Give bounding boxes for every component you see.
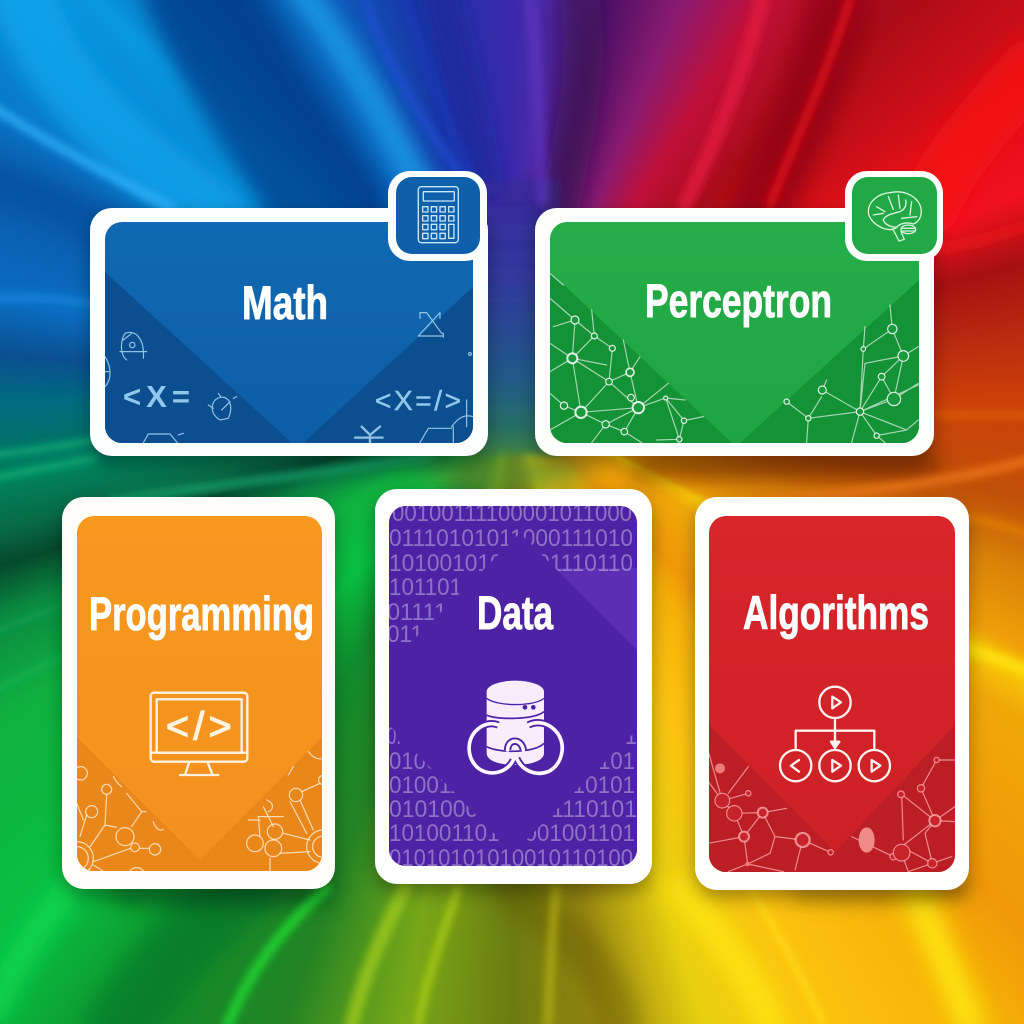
central olive haze	[420, 454, 590, 490]
binary pattern: 00100111100001011000	[392, 500, 632, 527]
binary pattern: 1	[625, 723, 637, 750]
panel: Data	[375, 489, 652, 892]
heading: Data: Data	[477, 586, 554, 639]
icon: brain badge	[845, 171, 943, 261]
icon: flow tree	[780, 687, 890, 781]
card frame	[695, 497, 969, 890]
binary pattern	[387, 500, 637, 872]
binary pattern: 0.	[387, 723, 401, 750]
card frame	[375, 489, 652, 884]
central gap glow	[460, 180, 560, 456]
binary pattern: 011	[387, 621, 423, 648]
card face	[77, 516, 322, 871]
icon: database with links	[469, 681, 562, 773]
heading: Programming: Programming	[89, 587, 314, 640]
card frame	[62, 497, 335, 889]
binary pattern: 01111	[387, 599, 447, 626]
icon: monitor with code: </>	[166, 704, 232, 748]
panel: Programming	[60, 497, 340, 897]
binary pattern: 101101	[389, 574, 462, 601]
binary pattern: 10100101011101110110	[389, 550, 633, 577]
card face	[389, 506, 637, 866]
card frame	[535, 208, 934, 456]
binary pattern: 01001101011010010101	[389, 772, 635, 799]
card frame	[90, 208, 488, 456]
card face	[105, 222, 473, 443]
binary pattern: 01110101011000111010	[389, 525, 633, 552]
circuit pattern	[77, 738, 322, 871]
panel: Algorithms	[695, 497, 969, 898]
math symbols right: <X=/>	[375, 385, 461, 416]
icon: monitor with code	[151, 693, 247, 775]
binary pattern: 10100110101001001101	[389, 820, 635, 847]
heading: Perceptron: Perceptron	[645, 274, 832, 327]
neural network pattern	[550, 272, 919, 443]
panel: Perceptron	[535, 171, 943, 464]
math symbols left: <X=	[123, 379, 190, 414]
icon: calculator badge	[388, 171, 487, 261]
binary pattern: 01010001011101110101	[389, 796, 637, 823]
binary pattern: 01010101010010110100	[389, 845, 633, 872]
card face	[709, 516, 955, 872]
heading: Math: Math	[242, 276, 328, 329]
network pattern	[708, 725, 955, 872]
binary pattern: 01001010010101010101	[389, 748, 635, 775]
corner pattern and doodles	[105, 272, 473, 443]
heading: Algorithms: Algorithms	[743, 586, 929, 639]
panel: Math	[90, 171, 488, 464]
card face	[550, 222, 919, 443]
